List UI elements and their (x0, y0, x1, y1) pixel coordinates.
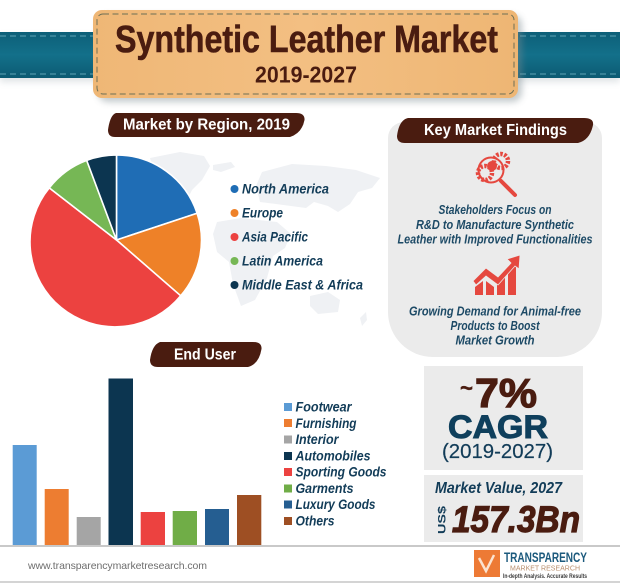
slice: Europe (116, 213, 201, 296)
slice: Middle East & Africa (87, 155, 116, 240)
finding text: animal-free demand (409, 304, 581, 348)
finding text: R&D: Stakeholders Focus on (438, 203, 552, 217)
legend item: Europe: Europe (242, 204, 283, 220)
logo mark (474, 550, 500, 577)
bar: Sporting Goods (141, 512, 165, 545)
finding text: animal-free demand: Products to Boost (450, 319, 540, 333)
finding text: R&D: Leather with Improved Functionalities (398, 232, 593, 246)
CAGR period: (2019-2027) (442, 441, 553, 463)
heading: key market findings: Key Market Findings (424, 122, 567, 139)
panel: market value (424, 475, 583, 542)
legend item: Automobiles: Automobiles (295, 447, 371, 463)
legend item: North America: North America (242, 180, 329, 196)
CAGR label: CAGR (448, 409, 548, 445)
legend item: Interior: Interior (296, 431, 340, 447)
bar: Footwear (13, 445, 37, 545)
footer url: www.transparencymarketresearch.com (27, 560, 207, 572)
legend item: Furnishing: Furnishing (296, 415, 357, 431)
market value label: Market Value, 2027 (435, 480, 563, 497)
slice: North America (116, 155, 197, 240)
title banner (0, 10, 620, 102)
CAGR value: 7% (475, 370, 537, 416)
slice: Asia Pacific (30, 188, 181, 327)
legend item: Luxury Goods: Luxury Goods (296, 496, 376, 512)
logo subtitle: MARKET RESEARCH (510, 566, 580, 572)
bar: Automobiles (108, 378, 133, 545)
legend: regions (230, 180, 363, 292)
bar: Interior (77, 517, 101, 545)
finding text: animal-free demand: Market Growth (456, 334, 535, 348)
icon: growth chart (473, 255, 520, 295)
heading: market by region: Market by Region, 2019 (123, 116, 290, 134)
slice: Latin America (49, 160, 116, 240)
title years: 2019-2027 (255, 62, 357, 88)
currency unit: US$ (436, 506, 448, 534)
legend item: Footwear: Footwear (296, 398, 353, 414)
legend item: Garments: Garments (296, 480, 354, 496)
heading: end user (150, 342, 262, 367)
legend item: Asia Pacific: Asia Pacific (241, 228, 308, 244)
legend: end user (284, 398, 387, 528)
legend item: Sporting Goods: Sporting Goods (296, 464, 387, 480)
logo name: TRANSPARENCY (504, 549, 587, 565)
finding text: R&D (398, 203, 593, 246)
bar: Luxury Goods (205, 509, 229, 545)
heading: market by region (108, 113, 305, 137)
pie chart: market by region (30, 155, 201, 327)
market value amount: 157.3Bn (452, 499, 580, 540)
finding text: animal-free demand: Growing Demand for Animal-free (409, 304, 581, 318)
CAGR value: ~ (460, 375, 473, 402)
logo tagline: In-depth Analysis. Accurate Results (503, 574, 588, 580)
heading: end user: End User (174, 346, 236, 364)
heading: key market findings (397, 118, 593, 143)
bar: Garments (173, 511, 197, 545)
bar: Others (237, 495, 261, 545)
bar chart: end user (13, 378, 261, 545)
world map backdrop (150, 152, 380, 326)
logo: Transparency Market Research (474, 549, 588, 580)
legend item: Middle East & Africa: Middle East & Africa (242, 276, 363, 292)
icon: magnifier with gears (478, 154, 515, 195)
title text: Synthetic Leather Market (115, 19, 498, 61)
legend item: Others: Others (296, 512, 335, 528)
footer rules (0, 545, 620, 583)
bar: Furnishing (45, 489, 69, 545)
legend item: Latin America: Latin America (242, 252, 323, 268)
panel: CAGR (424, 366, 583, 470)
finding text: R&D: R&D to Manufacture Synthetic (416, 218, 574, 232)
panel: key market findings (388, 118, 602, 357)
